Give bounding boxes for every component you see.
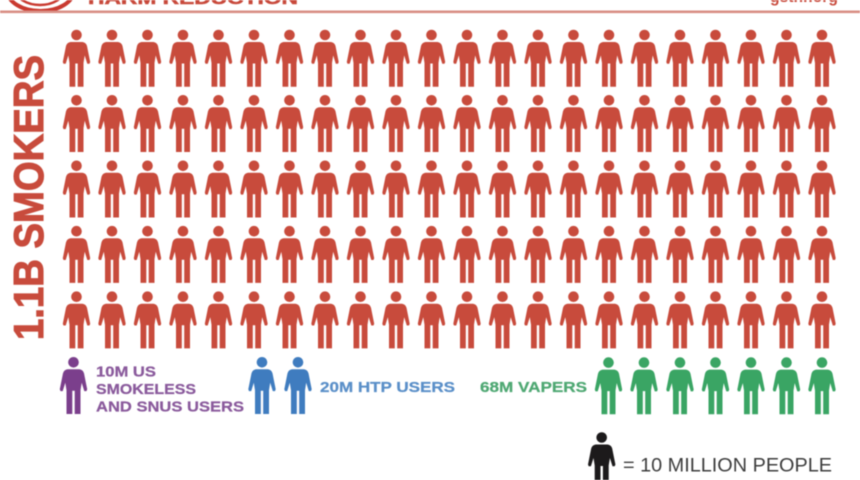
icon: blue figures (248, 357, 312, 414)
row 2 of smokers (63, 95, 836, 152)
row 3 of smokers (63, 160, 836, 218)
vertical label: 1.1B smokers: 1.1B SMOKERS (5, 55, 52, 340)
icon: black figure (588, 432, 615, 480)
label: smokeless and snus users: SMOKELESS (96, 381, 196, 398)
label: HTP users: 20M HTP USERS (320, 379, 455, 396)
legend: 10 million people (588, 432, 832, 480)
icon: green figures (595, 357, 836, 414)
row 4 of smokers (63, 226, 836, 283)
label: vapers: 68M VAPERS (480, 379, 587, 396)
row 5 of smokers (63, 291, 836, 348)
pictogram: smokers, 110 red figures (63, 30, 836, 348)
label: smokeless and snus users: AND SNUS USERS (96, 398, 244, 416)
row 1 of smokers (63, 30, 836, 87)
icon: purple figure (60, 357, 87, 414)
header strip: logo, title and website (0, 0, 860, 13)
icon: logo (8, 0, 74, 11)
label: smokeless and snus users: 10M US (96, 364, 156, 380)
legend text: = 10 MILLION PEOPLE (623, 456, 832, 476)
